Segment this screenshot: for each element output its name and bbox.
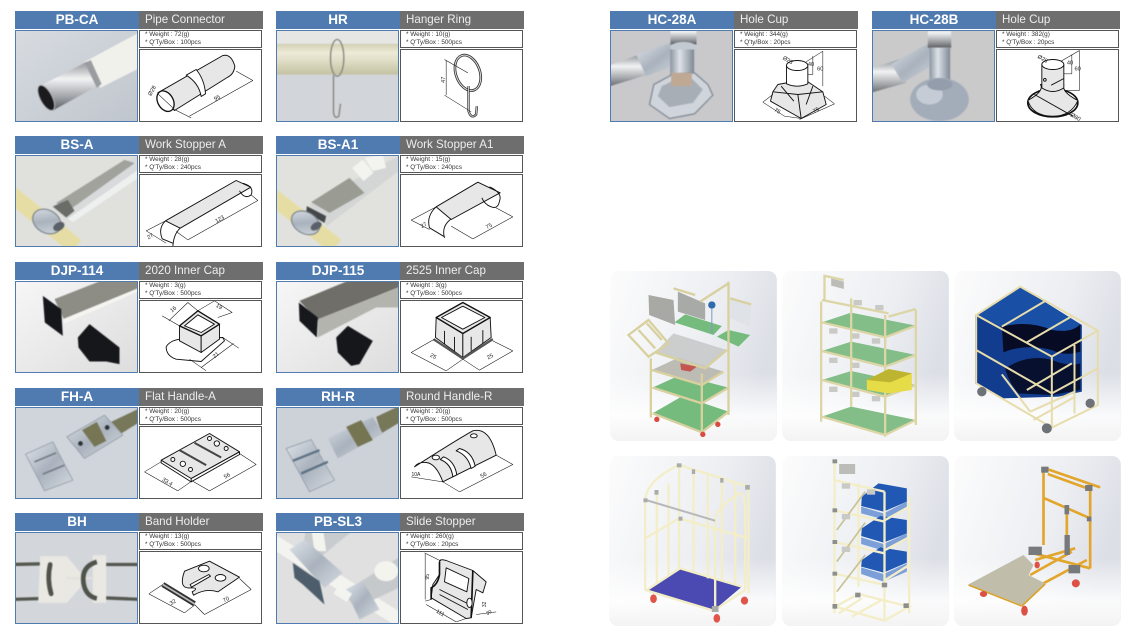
- specifications: [139, 281, 262, 299]
- part name: Hanger Ring: [406, 13, 471, 26]
- diagram: pipe connector: Ø28: [147, 85, 158, 97]
- diagram: work stopper A1: [400, 174, 523, 247]
- photo: hole cup B: [872, 30, 995, 122]
- photo: hanger ring: [276, 30, 399, 122]
- specifications: * Weight : 13(g): [145, 533, 189, 540]
- part code: BS-A: [60, 137, 94, 152]
- diagram: hole cup A: [734, 49, 857, 122]
- card: BH band holder: [15, 513, 263, 624]
- part name: [139, 388, 263, 406]
- part name: [400, 262, 524, 280]
- part code: [276, 388, 400, 406]
- part name: Pipe Connector: [145, 13, 225, 26]
- diagram: 2525 inner cap: 25: [429, 353, 437, 361]
- specifications: * Q'ty/Box : 20pcs: [740, 39, 791, 46]
- specifications: * Q'Ty/Box : 500pcs: [145, 541, 201, 548]
- part code: RH-R: [321, 389, 355, 404]
- part code: [276, 136, 400, 154]
- diagram: hole cup B: [996, 49, 1119, 122]
- diagram: hole cup A: Ø28: [781, 56, 794, 66]
- part name: [734, 11, 858, 29]
- specifications: [139, 532, 262, 550]
- card: DJP-115 2525 inner cap: [276, 262, 524, 373]
- photo: 2525 inner cap: [276, 281, 399, 373]
- photo: work stopper A1: [276, 155, 399, 247]
- specifications: * Q'Ty/Box : 20pcs: [1002, 39, 1054, 46]
- part code: [610, 11, 734, 29]
- part code: BS-A1: [318, 137, 358, 152]
- card: HC-28B hole cup: [872, 11, 1120, 122]
- part code: [276, 262, 400, 280]
- diagram: work stopper A: 27: [146, 233, 155, 241]
- photo: pipe connector: [15, 30, 138, 122]
- diagram: hole cup A: 75: [773, 107, 781, 116]
- part name: 2020 Inner Cap: [145, 264, 225, 277]
- rack render: workstation cart with panels: [610, 271, 777, 441]
- part code: HC-28B: [910, 12, 958, 27]
- specifications: * Weight : 260(g): [406, 533, 454, 540]
- card: DJP-114 2020 inner cap: [15, 262, 263, 373]
- specifications: * Weight : 382(g): [1002, 31, 1050, 38]
- diagram: hole cup B: 60: [1074, 66, 1081, 72]
- diagram: 2525 inner cap: [400, 300, 523, 373]
- part name: [139, 513, 263, 531]
- specifications: [139, 407, 262, 425]
- specifications: * Q'Ty/Box : 500pcs: [406, 39, 462, 46]
- part name: [139, 136, 263, 154]
- part code: PB-SL3: [314, 514, 362, 529]
- diagram: 2525 inner cap: 25: [486, 353, 495, 361]
- part name: [400, 388, 524, 406]
- photo: round handle: [276, 407, 399, 499]
- diagram: 2020 inner cap: 21: [212, 351, 221, 360]
- photo: band holder: [15, 532, 138, 624]
- diagram: flat handle: 33.4: [161, 477, 173, 488]
- rack render: three blue bins on flow rack: [782, 456, 949, 626]
- specifications: * Q'Ty/Box : 500pcs: [406, 290, 462, 297]
- card: PB-CA pipe connector: [15, 11, 263, 122]
- diagram: hole cup B: 40: [1067, 60, 1073, 66]
- diagram: band holder: 70: [222, 596, 231, 604]
- rack render: wire cage cart with purple base: [610, 456, 776, 626]
- diagram: 2020 inner cap: [139, 300, 262, 373]
- specifications: [400, 532, 523, 550]
- diagram: work stopper A1: 27: [420, 222, 428, 230]
- specifications: [400, 155, 523, 173]
- part code: FH-A: [61, 389, 93, 404]
- card: BS-A1 work stopper A1: [276, 136, 524, 247]
- part code: [15, 136, 139, 154]
- diagram: work stopper A1: 75: [485, 223, 494, 231]
- photo: slide stopper: [276, 532, 399, 624]
- part code: BH: [67, 514, 87, 529]
- part name: 2525 Inner Cap: [406, 264, 486, 277]
- part name: [996, 11, 1120, 29]
- part name: [400, 513, 524, 531]
- part name: Band Holder: [145, 515, 209, 528]
- part name: Work Stopper A: [145, 138, 226, 151]
- part code: [15, 388, 139, 406]
- specifications: * Weight : 3(g): [406, 282, 447, 289]
- specifications: * Weight : 20(g): [406, 408, 450, 415]
- specifications: * Weight : 28(g): [145, 156, 189, 163]
- diagram: slide stopper: 95: [425, 574, 431, 580]
- specifications: [139, 155, 262, 173]
- specifications: [139, 30, 262, 48]
- card: RH-R round handle: [276, 388, 524, 499]
- photo: 2020 inner cap: [15, 281, 138, 373]
- specifications: * Q'Ty/Box : 500pcs: [145, 290, 201, 297]
- part code: [15, 262, 139, 280]
- part name: [400, 136, 524, 154]
- specifications: * Q'Ty/Box : 500pcs: [406, 416, 462, 423]
- diagram: slide stopper: 30: [485, 609, 493, 617]
- rack render: yellow flat trolley: [954, 456, 1121, 626]
- specifications: * Q'Ty/Box : 20pcs: [406, 541, 458, 548]
- part name: Work Stopper A1: [406, 138, 493, 151]
- specifications: * Q'Ty/Box : 240pcs: [406, 164, 462, 171]
- diagram: hole cup A: 75: [812, 107, 821, 115]
- specifications: * Weight : 10(g): [406, 31, 450, 38]
- part code: PB-CA: [56, 12, 98, 27]
- diagram: flat handle: [139, 426, 262, 499]
- specifications: [734, 30, 857, 48]
- diagram: round handle: [400, 426, 523, 499]
- specifications: * Weight : 20(g): [145, 408, 189, 415]
- part code: HR: [328, 12, 348, 27]
- diagram: band holder: [139, 551, 262, 624]
- part name: Hole Cup: [740, 13, 788, 26]
- part code: HC-28A: [648, 12, 696, 27]
- diagram: work stopper A: [139, 174, 262, 247]
- card: BS-A work stopper A: [15, 136, 263, 247]
- specifications: [400, 407, 523, 425]
- specifications: * Weight : 15(g): [406, 156, 450, 163]
- specifications: [400, 281, 523, 299]
- part code: [276, 11, 400, 29]
- part name: [400, 11, 524, 29]
- specifications: * Weight : 3(g): [145, 282, 186, 289]
- photo: hole cup A: [610, 30, 733, 122]
- part name: Slide Stopper: [406, 515, 476, 528]
- rack render: blue partition rack: [954, 271, 1121, 441]
- specifications: * Q'Ty/Box : 100pcs: [145, 39, 201, 46]
- specifications: * Q'Ty/Box : 500pcs: [145, 416, 201, 423]
- diagram: hole cup A: 60: [817, 66, 823, 72]
- diagram: work stopper A: 123: [215, 215, 226, 225]
- card: PB-SL3 slide stopper: [276, 513, 524, 624]
- diagram: pipe connector: 95: [213, 94, 222, 103]
- part name: [139, 262, 263, 280]
- photo: work stopper A: [15, 155, 138, 247]
- rack render: four green shelves with yellow bin: [782, 271, 949, 441]
- diagram: hanger ring: 47: [441, 77, 447, 83]
- photo: flat handle: [15, 407, 138, 499]
- part code: [276, 513, 400, 531]
- specifications: * Q'Ty/Box : 240pcs: [145, 164, 201, 171]
- specifications: * Weight : 344(g): [740, 31, 788, 38]
- diagram: pipe connector: [139, 49, 262, 122]
- diagram: round handle: 10A: [412, 472, 421, 478]
- card: HC-28A hole cup: [610, 11, 858, 122]
- diagram: hole cup A: 40: [808, 62, 814, 68]
- diagram: slide stopper: 32: [482, 601, 488, 607]
- diagram: hanger ring: [400, 49, 523, 122]
- diagram: 2020 inner cap: 19: [215, 303, 223, 311]
- diagram: band holder: 32: [169, 599, 177, 607]
- diagram: flat handle: 56: [223, 472, 232, 481]
- part name: Flat Handle-A: [145, 390, 216, 403]
- diagram: round handle: 56: [480, 472, 488, 480]
- specifications: * Weight : 72(g): [145, 31, 189, 38]
- part name: Hole Cup: [1002, 13, 1050, 26]
- part code: [15, 11, 139, 29]
- diagram: 2020 inner cap: 16: [169, 305, 178, 314]
- card: FH-A flat handle: [15, 388, 263, 499]
- part name: Round Handle-R: [406, 390, 492, 403]
- specifications: [996, 30, 1119, 48]
- part code: [15, 513, 139, 531]
- part code: DJP-115: [312, 263, 364, 278]
- diagram: hole cup B: Ø28: [1036, 54, 1048, 65]
- part name: [139, 11, 263, 29]
- card: HR hanger ring: [276, 11, 524, 122]
- part code: DJP-114: [51, 263, 103, 278]
- diagram: slide stopper: [400, 551, 523, 624]
- specifications: [400, 30, 523, 48]
- part code: [872, 11, 996, 29]
- diagram: slide stopper: 111: [435, 609, 445, 618]
